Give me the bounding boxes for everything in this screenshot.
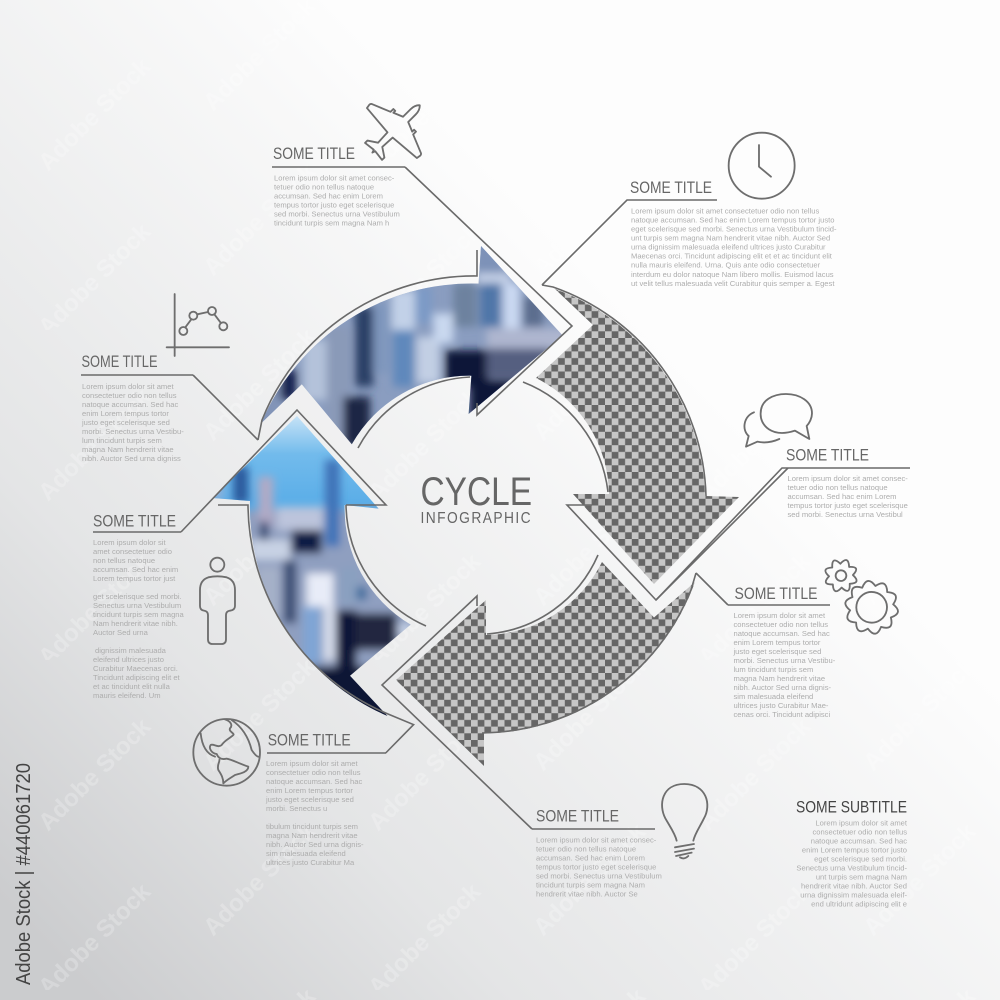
body text: ultrices justo Curabitur Mae- bbox=[734, 701, 829, 710]
body text: morbi. Senectus u bbox=[266, 804, 327, 813]
body text: Lorem ipsum dolor sit amet bbox=[815, 818, 908, 828]
body text: natoque accumsan. Sed hac bbox=[734, 629, 830, 638]
body text: morbi. Senectus urna Vestibu- bbox=[734, 656, 836, 665]
body text: end ultridunt adipiscing elit e bbox=[811, 900, 907, 908]
heading rule bbox=[656, 468, 910, 600]
panel: right gears bbox=[728, 555, 902, 719]
heading rule bbox=[81, 374, 193, 376]
body text: enim Lorem tempus tortor bbox=[82, 409, 169, 418]
panel: left chart bbox=[81, 294, 229, 463]
panel: top right clock bbox=[542, 133, 837, 288]
center title bbox=[420, 470, 532, 527]
body text: enim Lorem tempus tortor bbox=[734, 638, 821, 647]
body text: eleifend ultrices justo bbox=[93, 655, 164, 664]
body text: Lorem ipsum dolor sit amet bbox=[266, 759, 358, 768]
body text: amet consectetuer odio bbox=[93, 547, 172, 556]
icon: line chart bbox=[167, 294, 229, 356]
icon: plane bbox=[347, 80, 445, 178]
body text: magna Nam hendrerit vitae bbox=[734, 674, 825, 683]
body text: accumsan. Sed hac enim Lorem bbox=[274, 192, 383, 200]
heading: SOME TITLE bbox=[93, 513, 176, 531]
body text: hendrerit vitae nibh. Auctor Se bbox=[536, 890, 638, 899]
body text: consectetuer odio non tellus bbox=[266, 768, 361, 777]
body text: natoque accumsan. Sed hac bbox=[82, 400, 178, 409]
icon: gears bbox=[820, 555, 902, 637]
body text: Lorem ipsum dolor sit amet bbox=[734, 611, 826, 620]
icon: light bulb bbox=[662, 784, 707, 858]
heading rule bbox=[267, 752, 386, 754]
heading: SOME TITLE bbox=[82, 353, 158, 371]
body text: Senectus urna Vestibulum bbox=[93, 601, 181, 610]
arrow outlines bbox=[181, 167, 788, 829]
body text: sed morbi. Senectus urna Vestibul bbox=[788, 510, 903, 519]
panel: bottom bulb bbox=[532, 784, 707, 899]
body text: natoque accumsan. Sed hac enim Lorem tempus tortor justo bbox=[631, 216, 834, 225]
body text: justo eget scelerisque sed bbox=[732, 647, 821, 656]
body text: accumsan. Sed hac enim Lorem bbox=[788, 492, 896, 501]
body text: get scelerisque sed morbi. bbox=[93, 592, 182, 601]
body text: tempus tortor justo eget scelerisque bbox=[274, 200, 394, 210]
body text: tempus tortor justo eget scelerisque bbox=[536, 863, 656, 872]
body text: Curabitur Maecenas orci. bbox=[93, 664, 178, 673]
body text: unt turpis sem magna Nam bbox=[816, 872, 907, 882]
body text: lum tincidunt turpis sem bbox=[734, 665, 813, 674]
body text: tincidunt turpis sem magna Nam bbox=[536, 881, 645, 890]
body text: urna dignissim malesuada eleifend ultrices justo Curabitur bbox=[631, 243, 826, 252]
body text: Maecenas orci. Tincidunt adipiscing elit et et ac tincidunt elit bbox=[631, 252, 833, 261]
body text: magna Nam hendrerit vitae bbox=[266, 831, 358, 840]
heading: SOME TITLE bbox=[734, 585, 818, 603]
heading: SOME TITLE bbox=[786, 447, 869, 465]
panel: right speech bbox=[656, 394, 910, 600]
body text: tetuer odio non tellus natoque bbox=[274, 182, 374, 192]
heading: SOME SUBTITLE bbox=[796, 799, 907, 817]
icon: clock bbox=[729, 133, 795, 199]
body text: dignissim malesuada bbox=[95, 646, 167, 655]
body text: Lorem ipsum dolor sit amet bbox=[82, 382, 174, 391]
body text: nibh. Auctor Sed urna digniss bbox=[82, 454, 181, 463]
body text: natoque accumsan. Sed hac bbox=[811, 836, 907, 846]
body text: nibh. Auctor Sed urna dignis- bbox=[266, 840, 364, 849]
body text: ut velit tellus malesuada velit Curabitur quis semper a. Egest bbox=[631, 279, 835, 288]
body text: tetuer odio non tellus natoque bbox=[536, 845, 636, 854]
body text: eget scelerisque sed morbi. Senectus urna Vestibulum tincid- bbox=[631, 225, 837, 234]
stock id label: Adobe Stock | #440061720 bbox=[13, 763, 35, 985]
heading rule bbox=[93, 531, 181, 533]
panel: bottom left globe bbox=[193, 719, 386, 867]
body text: Lorem ipsum dolor sit amet consec- bbox=[536, 836, 657, 845]
heading rule bbox=[532, 828, 655, 830]
body text: justo eget scelerisque sed bbox=[265, 795, 354, 804]
body text: morbi. Senectus urna Vestibu- bbox=[82, 427, 184, 436]
body text: eget scelerisque sed morbi. bbox=[814, 854, 907, 864]
body text: Lorem tempus tortor just bbox=[93, 574, 176, 583]
body text: tempus tortor justo eget scelerisque bbox=[788, 501, 908, 510]
body text: sed morbi. Senectus urna Vestibulum bbox=[274, 210, 400, 218]
body text: sed morbi. Senectus urna Vestibulum bbox=[536, 872, 662, 881]
body text: tibulum tincidunt turpis sem bbox=[266, 822, 358, 831]
body text: ultrices justo Curabitur Ma bbox=[266, 858, 355, 867]
body text: consectetuer odio non tellus bbox=[812, 828, 907, 836]
heading rule bbox=[272, 166, 405, 168]
body text: urna dignissim malesuada eleif- bbox=[800, 890, 907, 900]
heading: SOME TITLE bbox=[273, 145, 355, 163]
body text: tincidunt turpis sem magna Nam h bbox=[274, 218, 389, 228]
arrow: right checker bbox=[536, 289, 739, 584]
icon: globe bbox=[193, 719, 260, 786]
heading rule bbox=[728, 604, 830, 606]
body text: Lorem ipsum dolor sit amet consec- bbox=[788, 474, 908, 483]
body text: enim Lorem tempus tortor bbox=[266, 786, 353, 795]
body text: Auctor Sed urna bbox=[93, 628, 149, 637]
body text: nulla mauris eleifend. Urna. Quis ante odio consectetuer bbox=[631, 261, 821, 270]
arrow: top photo bbox=[262, 246, 562, 444]
body text: Nam hendrerit vitae nibh. bbox=[93, 619, 178, 628]
body text: tetuer odio non tellus natoque bbox=[788, 483, 888, 492]
body text: consectetuer odio non tellus bbox=[82, 391, 177, 400]
panel: subtitle bbox=[796, 799, 908, 908]
body text: Tincidunt adipiscing elit et bbox=[93, 673, 181, 682]
body text: justo eget scelerisque sed bbox=[81, 418, 170, 427]
heading: SOME TITLE bbox=[630, 179, 712, 197]
heading: SOME TITLE bbox=[536, 808, 619, 826]
body text: nibh. Auctor Sed urna dignis- bbox=[734, 683, 831, 692]
arrow: bottom checker bbox=[396, 562, 695, 766]
body text: tincidunt turpis sem magna bbox=[93, 610, 185, 619]
panel: left person bbox=[93, 513, 235, 700]
body text: Lorem ipsum dolor sit amet consec- bbox=[274, 174, 395, 182]
body text: Senectus urna Vestibulum tincid- bbox=[796, 864, 907, 872]
body text: natoque accumsan. Sed hac bbox=[266, 777, 362, 786]
body text: unt turpis sem magna Nam hendrerit vitae nibh. Auctor Sed bbox=[631, 234, 830, 243]
body text: non tellus natoque bbox=[93, 556, 155, 565]
body text: cenas orci. Tincidunt adipisci bbox=[734, 710, 830, 719]
body text: accumsan. Sed hac enim Lorem bbox=[536, 854, 645, 863]
body text: sim malesuada eleifend bbox=[734, 692, 813, 701]
body text: mauris eleifend. Um bbox=[93, 691, 161, 700]
body text: accumsan. Sed hac enim bbox=[93, 565, 178, 574]
body text: et ac tincidunt elit nulla bbox=[93, 682, 171, 691]
title: cycle: CYCLE bbox=[420, 470, 532, 514]
body text: enim Lorem tempus tortor justo bbox=[802, 846, 907, 854]
heading: SOME TITLE bbox=[268, 732, 351, 750]
body text: lum tincidunt turpis sem bbox=[82, 436, 162, 445]
icon: speech bubbles bbox=[744, 394, 812, 447]
body text: magna Nam hendrerit vitae bbox=[82, 445, 174, 454]
body text: Lorem ipsum dolor sit amet consectetuer odio non tellus bbox=[631, 206, 819, 216]
heading rule bbox=[542, 200, 717, 285]
body text: hendrerit vitae nibh. Auctor Sed bbox=[801, 882, 907, 890]
body text: consectetuer odio non tellus bbox=[734, 620, 828, 629]
body text: sim malesuada eleifend bbox=[266, 849, 346, 858]
arrow: left photo bbox=[214, 416, 410, 716]
icon: person bbox=[200, 558, 235, 644]
body text: Lorem ipsum dolor sit bbox=[93, 538, 166, 547]
subtitle: infographic: INFOGRAPHIC bbox=[420, 510, 532, 527]
panel: top left plane bbox=[272, 80, 445, 227]
body text: interdum eu dolor natoque Nam libero mollis. Euismod lacus bbox=[631, 270, 834, 279]
